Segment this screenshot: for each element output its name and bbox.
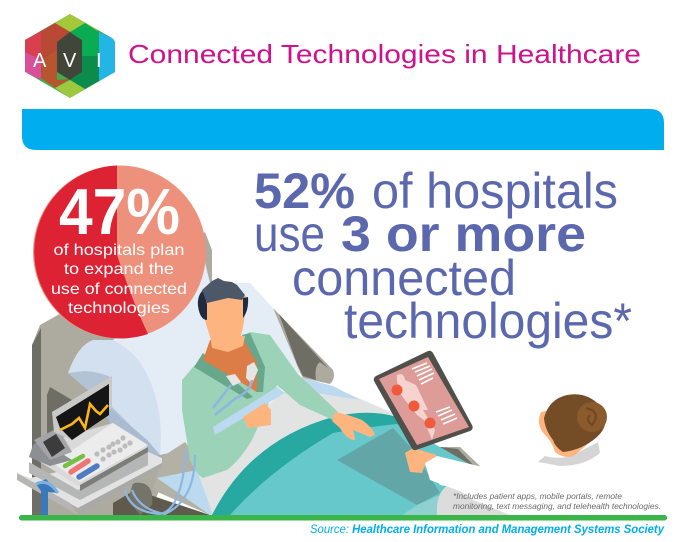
source line: Source: Healthcare Information and Management Systems Society	[310, 524, 665, 536]
text: 52% headline: technologies*	[344, 293, 632, 349]
title: Connected Technologies in Healthcare	[128, 39, 641, 69]
footnote: *Includes patient apps, mobile portals, remote	[453, 491, 622, 501]
banner	[22, 109, 664, 150]
illustration: bed sheets and blanket	[153, 378, 497, 515]
illustration: pillow	[68, 262, 300, 470]
icon: AVI hexagon logo: I	[96, 50, 102, 72]
illustration: monitor cart	[17, 376, 195, 515]
text: pie caption	[51, 242, 187, 317]
footnote	[453, 491, 661, 511]
text: pie caption: technologies	[68, 300, 170, 317]
text: 52% headline: of hospitals	[372, 163, 618, 219]
icon: doctor coat	[425, 440, 612, 515]
text: 52% headline: connected	[292, 250, 516, 306]
chart: 47% pie circle	[33, 166, 206, 338]
footnote: monitoring, text messaging, and telehealth technologies.	[453, 501, 661, 511]
text: 52% headline: 3 or more	[341, 206, 586, 262]
text: pie caption: of hospitals plan	[54, 242, 184, 259]
text: pie caption: use of connected	[51, 281, 187, 298]
illustration: doctor	[405, 394, 612, 515]
icon: AVI hexagon logo: V	[63, 50, 77, 72]
icon: cable holder	[36, 479, 58, 515]
icon: AVI hexagon logo: A	[33, 50, 47, 72]
icon: tablet	[374, 351, 473, 450]
icon: doctor hair	[544, 394, 607, 452]
text: 52% headline	[254, 163, 632, 349]
icon: patient head	[198, 278, 248, 352]
icon: monitor screen	[52, 376, 112, 440]
illustration: patient	[182, 278, 375, 478]
icon: AVI hexagon logo	[25, 14, 115, 98]
footer rule	[19, 515, 667, 520]
illustration: hospital bed	[32, 232, 482, 515]
text: 52% headline: use	[254, 206, 325, 262]
text: pie caption: to expand the	[64, 261, 174, 278]
stat: 47%: 47%	[59, 175, 180, 248]
text: 52% headline: 52%	[254, 163, 355, 219]
